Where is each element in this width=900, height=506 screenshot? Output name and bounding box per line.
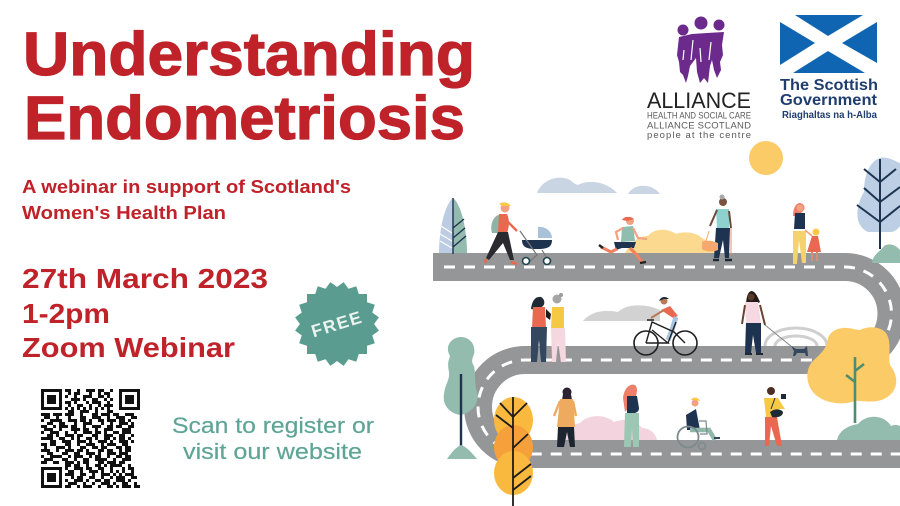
cloud: grey (583, 305, 660, 321)
arcs: grey rings (765, 328, 827, 346)
person: woman with stroller (485, 202, 552, 264)
icon: stroller (520, 227, 552, 264)
person: mother and child (793, 203, 821, 264)
scan to register text (172, 413, 375, 464)
logo: Scottish Government (780, 15, 878, 121)
cloud: pink (557, 416, 657, 440)
badge: free (295, 282, 379, 366)
Alliance strapline: people at the centre (647, 130, 751, 141)
Alliance strapline: HEALTH AND SOCIAL CARE (647, 110, 751, 122)
subtitle (22, 177, 351, 223)
person: runner (599, 217, 647, 263)
Scottish Government wordmark: Government (780, 92, 877, 109)
event details (22, 263, 268, 363)
event details: Zoom Webinar (22, 332, 235, 363)
icon: sun (749, 141, 783, 175)
person: wheelchair user (678, 397, 720, 450)
icon: dog (791, 346, 808, 356)
Alliance strapline: ALLIANCE SCOTLAND (647, 120, 751, 132)
Scottish Government wordmark: The Scottish (780, 77, 878, 94)
Scottish Government wordmark (780, 77, 878, 121)
logo: Alliance (647, 16, 751, 141)
scan to register text: visit our website (183, 439, 362, 464)
tree: yellow (807, 327, 896, 423)
person: pregnant woman (623, 385, 639, 447)
person: cyclist (634, 297, 697, 355)
person: older woman with bag (702, 194, 732, 260)
tree: top right (857, 157, 900, 249)
subtitle: A webinar in support of Scotland's (22, 177, 351, 197)
tablet (546, 309, 551, 320)
woman left (531, 297, 547, 362)
event details: 1-2pm (22, 298, 110, 329)
scan to register text: Scan to register or (172, 413, 375, 438)
badge: free: FREE (309, 307, 365, 341)
Scottish Government wordmark: Riaghaltas na h-Alba (782, 110, 877, 121)
tree: left green (444, 337, 478, 459)
QR code (41, 389, 140, 488)
title: Understanding (23, 20, 475, 88)
person: two women talking (531, 293, 566, 362)
title (23, 20, 475, 152)
tree: orange (494, 397, 533, 506)
Alliance wordmark: ALLIANCE (647, 88, 751, 113)
cloud: yellow (625, 230, 716, 253)
subtitle: Women's Health Plan (22, 203, 226, 223)
bush: green right (837, 417, 900, 440)
title: Endometriosis (24, 84, 465, 152)
event details: 27th March 2023 (22, 263, 268, 294)
icon: wheelchair (678, 421, 707, 450)
tree: left leaf (439, 198, 467, 254)
icon: Alliance figures (677, 16, 724, 83)
bush: top right (872, 244, 900, 263)
person: man with camera (764, 387, 786, 446)
leash (765, 325, 792, 347)
road (433, 267, 900, 454)
clouds: blue (537, 178, 660, 194)
icon: saltire flag (780, 15, 877, 73)
person: woman in headscarf (554, 388, 576, 447)
Alliance strapline (647, 110, 751, 141)
woman right (551, 293, 566, 362)
icon: bicycle (634, 320, 697, 355)
person: woman with dog (742, 291, 808, 356)
